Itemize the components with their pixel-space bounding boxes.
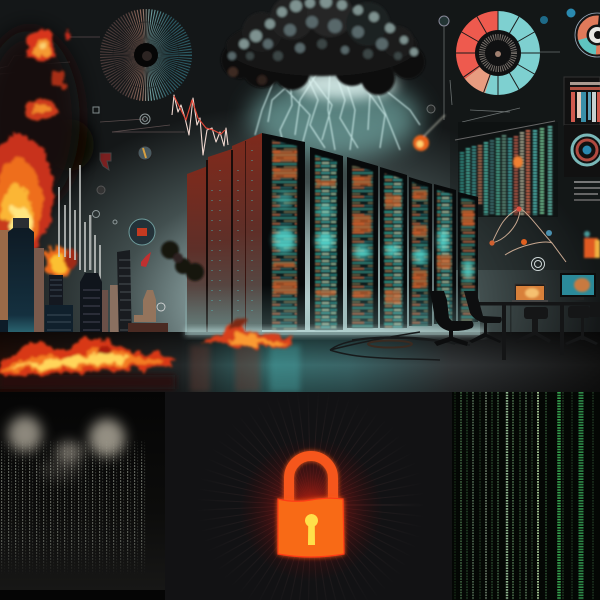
tower three	[80, 273, 102, 345]
panel: padlock	[165, 392, 452, 600]
grey cloud puffs	[8, 416, 125, 480]
ring gauge panel	[564, 125, 600, 201]
white spike bars	[58, 165, 101, 280]
red debris	[141, 252, 151, 267]
floor cables	[330, 332, 470, 360]
spark explosion	[413, 115, 445, 151]
small hud icons	[92, 107, 165, 311]
screen glow teal	[273, 192, 473, 280]
red glow	[239, 438, 383, 582]
background buildings	[0, 230, 165, 345]
tower one	[0, 218, 34, 356]
lock shackle	[289, 456, 333, 506]
right dashboard wall	[427, 0, 600, 270]
bottom black strip	[0, 392, 600, 600]
light rays	[249, 443, 373, 567]
far chairs	[515, 306, 598, 345]
cloud body	[221, 0, 425, 95]
desk	[468, 302, 600, 360]
eye radial chart	[113, 22, 179, 88]
lock body	[278, 498, 344, 557]
screen glow orange	[273, 150, 474, 304]
chair one	[430, 291, 474, 346]
tower four	[117, 250, 132, 345]
keyhole	[305, 514, 318, 545]
scene background	[0, 0, 600, 392]
laptop	[512, 284, 548, 302]
small fire blot on panel	[584, 231, 600, 258]
red line chart	[172, 95, 228, 155]
monitor	[560, 273, 596, 300]
panel: green code columns	[452, 392, 600, 600]
storm cloud with lightning	[221, 0, 425, 158]
left fire and smoke	[0, 29, 94, 279]
network graph	[489, 206, 566, 270]
bar panel top right	[564, 77, 600, 125]
rack screens	[272, 140, 475, 330]
data rain	[0, 440, 146, 575]
rack base fire	[205, 315, 295, 347]
city skyline	[0, 165, 168, 356]
floor	[0, 332, 600, 392]
lightning	[255, 70, 420, 150]
tower two	[45, 275, 73, 352]
city base fire	[0, 337, 175, 376]
pie wheel chart	[453, 8, 543, 98]
rack fronts	[262, 133, 478, 330]
low brown block	[128, 323, 168, 353]
office desk and chairs	[430, 273, 600, 360]
smoke plume by racks	[161, 241, 204, 281]
chair two	[464, 291, 502, 343]
red side racks	[187, 133, 262, 332]
rack bottom fade	[185, 285, 480, 335]
second ring chart	[575, 13, 600, 57]
panel: cloud rain	[0, 392, 165, 590]
rack base mist	[185, 328, 485, 336]
small wall icons	[427, 8, 576, 122]
data column chart	[455, 121, 558, 217]
server racks	[185, 133, 485, 336]
circuit lines left	[0, 37, 185, 132]
